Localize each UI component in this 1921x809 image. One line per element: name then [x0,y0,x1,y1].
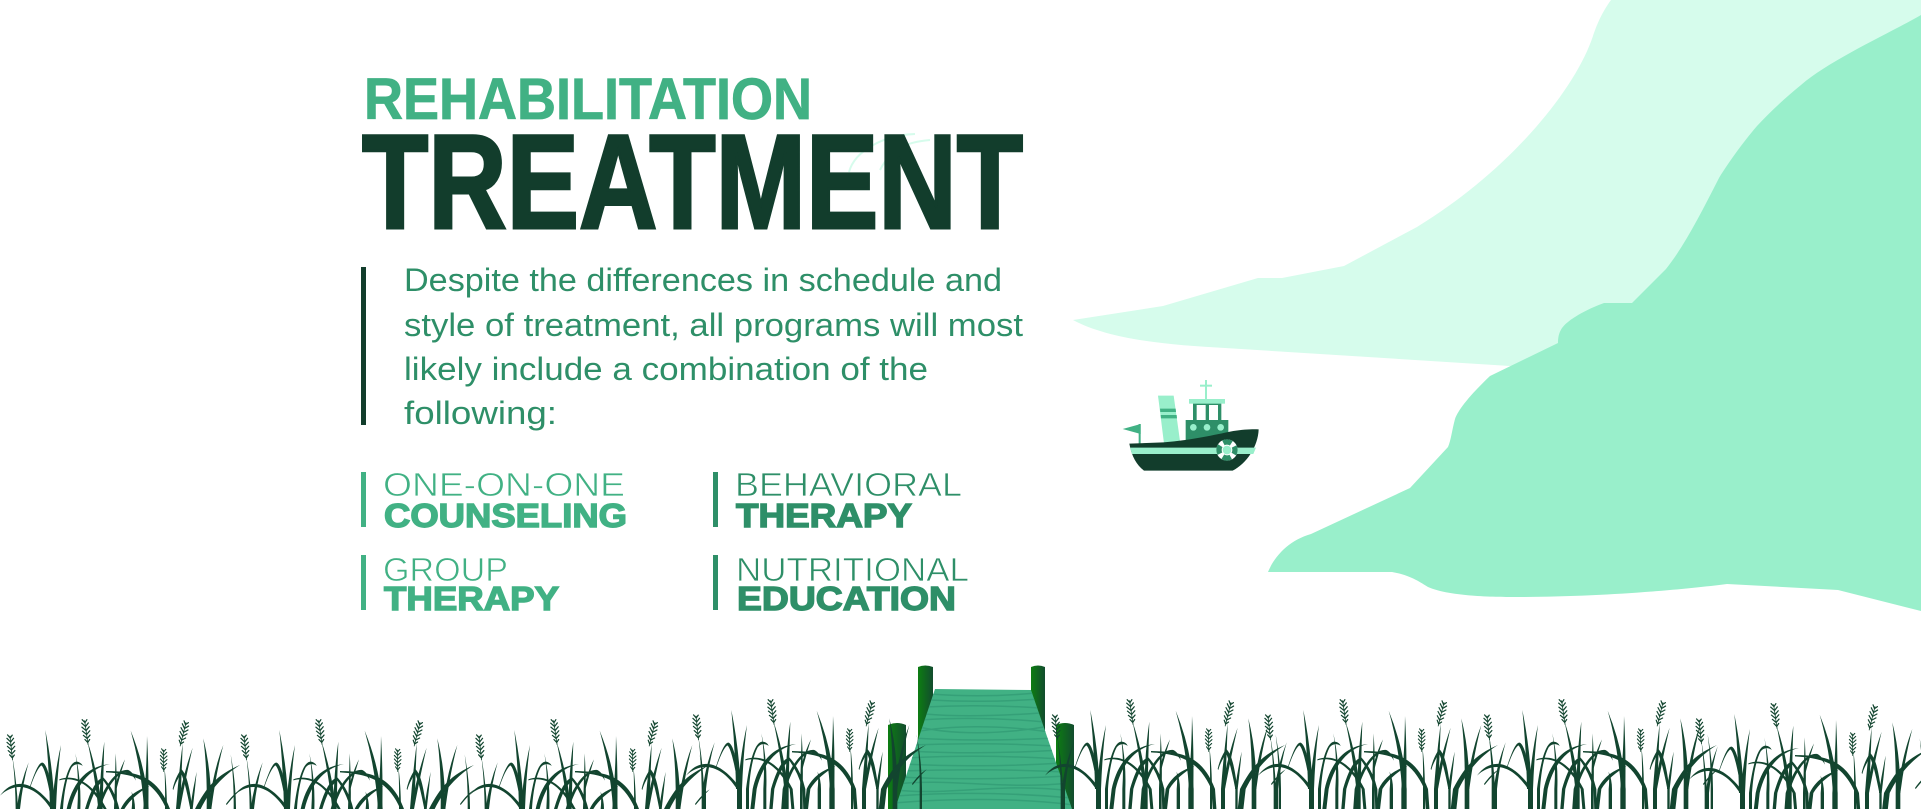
item: nutritional education [713,551,969,617]
dock front posts [888,723,1074,809]
item: nutritional education: EDUCATION [737,580,956,617]
item: one-on-one counseling: COUNSELING [384,497,627,534]
grass: left of dock [0,699,927,809]
mountain: distant pale cliff [1073,0,1921,400]
intro paragraph: Despite the differences in schedule and [404,262,1002,298]
intro paragraph: likely include a combination of the [404,351,928,387]
item: nutritional education: NUTRITIONAL [736,551,969,588]
item: behavioral therapy: BEHAVIORAL [735,466,962,503]
intro paragraph: following: [404,395,557,431]
mountain: near cliff [1268,15,1921,611]
grass: right of dock [1045,699,1921,809]
dock walkway with wood grain [893,689,1074,809]
item: group therapy: GROUP [383,551,508,588]
icon: boat [1123,380,1259,471]
intro paragraph [404,262,1023,431]
title: treatment: TREATMENT [362,108,1023,257]
item: group therapy: THERAPY [384,580,559,617]
decorative faint curve behind title [849,134,930,172]
item: group therapy [361,551,559,617]
title: rehabilitation: REHABILITATION [364,67,812,132]
item: behavioral therapy [713,466,962,534]
intro accent bar [361,267,366,425]
item: behavioral therapy: THERAPY [736,497,912,534]
item: one-on-one counseling: ONE-ON-ONE [383,466,625,503]
intro paragraph: style of treatment, all programs will most [404,307,1023,343]
item: one-on-one counseling [361,466,627,534]
dock back posts [918,666,1045,740]
